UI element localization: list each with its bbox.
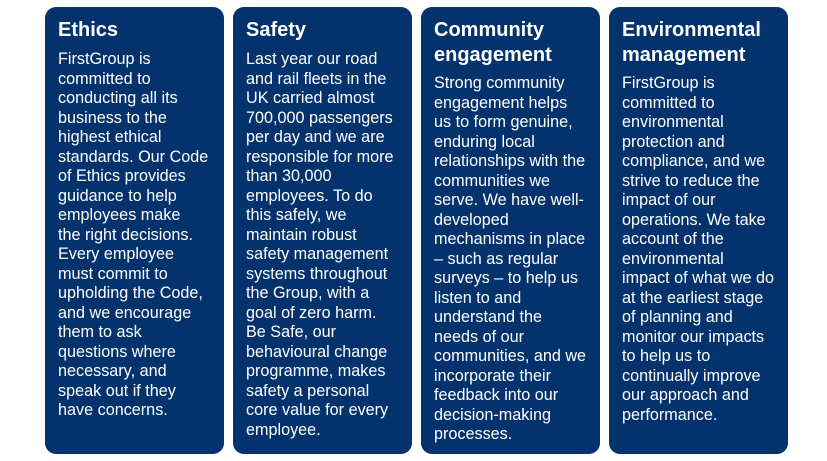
text block: Community engagement body: developed [434, 210, 509, 228]
text block: Ethics body: FirstGroup is [58, 50, 151, 68]
text block: Community engagement body: us to form genuine, [434, 113, 573, 131]
text block: Environmental management body: our approach and [622, 386, 749, 404]
text block: Community engagement body: communities, and we [434, 347, 586, 365]
text block: Ethics body: business to the [58, 108, 167, 126]
text block: Environmental management body: account of the [622, 230, 724, 248]
text block: Safety body: employee. [246, 420, 321, 438]
heading: Safety: Safety [246, 19, 306, 41]
text block: Environmental management body: to help us to [622, 347, 710, 365]
text block: Community engagement body: decision-making [434, 406, 551, 424]
text block: Community engagement body: understand the [434, 308, 542, 326]
text block: Environmental management body: impact of our [622, 191, 716, 209]
text block: Safety body: employees. To do [246, 186, 373, 204]
text block: Safety body: the Group, with a [246, 284, 369, 302]
text block: Community engagement body: enduring local [434, 132, 535, 150]
text block: Environmental management body: FirstGroup is [622, 74, 715, 92]
text block: Community engagement body: mechanisms in place [434, 230, 585, 248]
text block: Ethics body [58, 50, 208, 419]
text block: Environmental management body: performance. [622, 406, 717, 424]
text block: Safety body: systems throughout [246, 264, 387, 282]
text block: Ethics body: and we encourage [58, 304, 191, 322]
text block: Safety body: goal of zero harm. [246, 304, 376, 322]
text block: Environmental management body [622, 74, 774, 424]
text block: Ethics body: employees make [58, 206, 180, 224]
text block: Community engagement body: engagement helps [434, 94, 567, 112]
text block: Ethics body: standards. Our Code [58, 148, 208, 166]
text block: Ethics body: them to ask [58, 323, 142, 341]
text block: Environmental management body: monitor our impacts [622, 328, 764, 346]
text block: Ethics body: of Ethics provides [58, 167, 186, 185]
text block: Ethics body: have concerns. [58, 401, 168, 419]
text block: Ethics body: the right decisions. [58, 226, 193, 244]
heading: Community engagement: engagement [434, 44, 552, 66]
panel: Safety [233, 7, 412, 454]
text block: Environmental management body: operations. We take [622, 210, 766, 228]
text block: Environmental management body: impact of what we do [622, 269, 774, 287]
text block: Community engagement body: incorporate their [434, 366, 551, 384]
text block: Safety body: responsible for more [246, 148, 394, 166]
text block: Safety body: core value for every [246, 401, 388, 419]
text block: Environmental management body: of planning and [622, 308, 733, 326]
text block: Community engagement body: – such as regular [434, 250, 558, 268]
text block: Environmental management body: continually improve [622, 366, 761, 384]
text block: Ethics body: guidance to help [58, 186, 177, 204]
text block: Safety body: per day and we are [246, 128, 385, 146]
text block: Safety body: safety management [246, 245, 388, 263]
text block: Safety body: Be Safe, our [246, 323, 336, 341]
text block: Community engagement body: feedback into our [434, 386, 558, 404]
text block: Ethics body: questions where [58, 342, 176, 360]
text block: Ethics body: Every employee [58, 245, 174, 263]
heading: Community engagement [434, 19, 552, 66]
text block: Community engagement body: serve. We have well- [434, 191, 584, 209]
text block: Ethics body: speak out if they [58, 382, 176, 400]
text block: Ethics body: conducting all its [58, 89, 178, 107]
text block: Safety body: safety a personal [246, 382, 369, 400]
panel: Environmental management [609, 7, 788, 454]
text block: Community engagement body: surveys – to help us [434, 269, 578, 287]
text block: Environmental management body: at the earliest stage [622, 288, 763, 306]
text block: Safety body: and rail fleets in the [246, 70, 386, 88]
text block: Community engagement body: communities we [434, 172, 550, 190]
text block: Safety body [246, 50, 394, 438]
text block: Ethics body: committed to [58, 70, 151, 88]
text block: Environmental management body: environmental [622, 113, 724, 131]
text block: Safety body: than 30,000 [246, 167, 332, 185]
text block: Ethics body: necessary, and [58, 362, 167, 380]
text block: Community engagement body: processes. [434, 425, 512, 443]
text block: Community engagement body: listen to and [434, 288, 521, 306]
heading: Environmental management: Environmental [622, 19, 761, 41]
text block: Safety body: UK carried almost [246, 89, 375, 107]
panel: Community engagement [421, 7, 600, 454]
text block: Ethics body: must commit to [58, 264, 168, 282]
text block: Community engagement body [434, 74, 586, 443]
heading: Community engagement: Community [434, 19, 544, 41]
text block: Safety body: behavioural change [246, 342, 387, 360]
text block: Ethics body: highest ethical [58, 128, 162, 146]
text block: Safety body: this safely, we [246, 206, 346, 224]
heading: Environmental management: management [622, 44, 745, 66]
panel: Ethics [45, 7, 224, 454]
text block: Environmental management body: strive to reduce the [622, 172, 760, 190]
text block: Safety body: maintain robust [246, 226, 357, 244]
text block: Environmental management body: environmental [622, 250, 724, 268]
text block: Safety body: programme, makes [246, 362, 385, 380]
text block: Safety body: Last year our road [246, 50, 377, 68]
text block: Environmental management body: protection and [622, 132, 725, 150]
text block: Ethics body: upholding the Code, [58, 284, 203, 302]
text block: Safety body: 700,000 passengers [246, 108, 393, 126]
text block: Community engagement body: relationships with the [434, 152, 585, 170]
heading: Environmental management [622, 19, 761, 66]
text block: Community engagement body: Strong community [434, 74, 564, 92]
text block: Environmental management body: committed to [622, 94, 715, 112]
text block: Community engagement body: needs of our [434, 328, 524, 346]
text block: Environmental management body: compliance, and we [622, 152, 765, 170]
heading: Ethics: Ethics [58, 19, 118, 41]
